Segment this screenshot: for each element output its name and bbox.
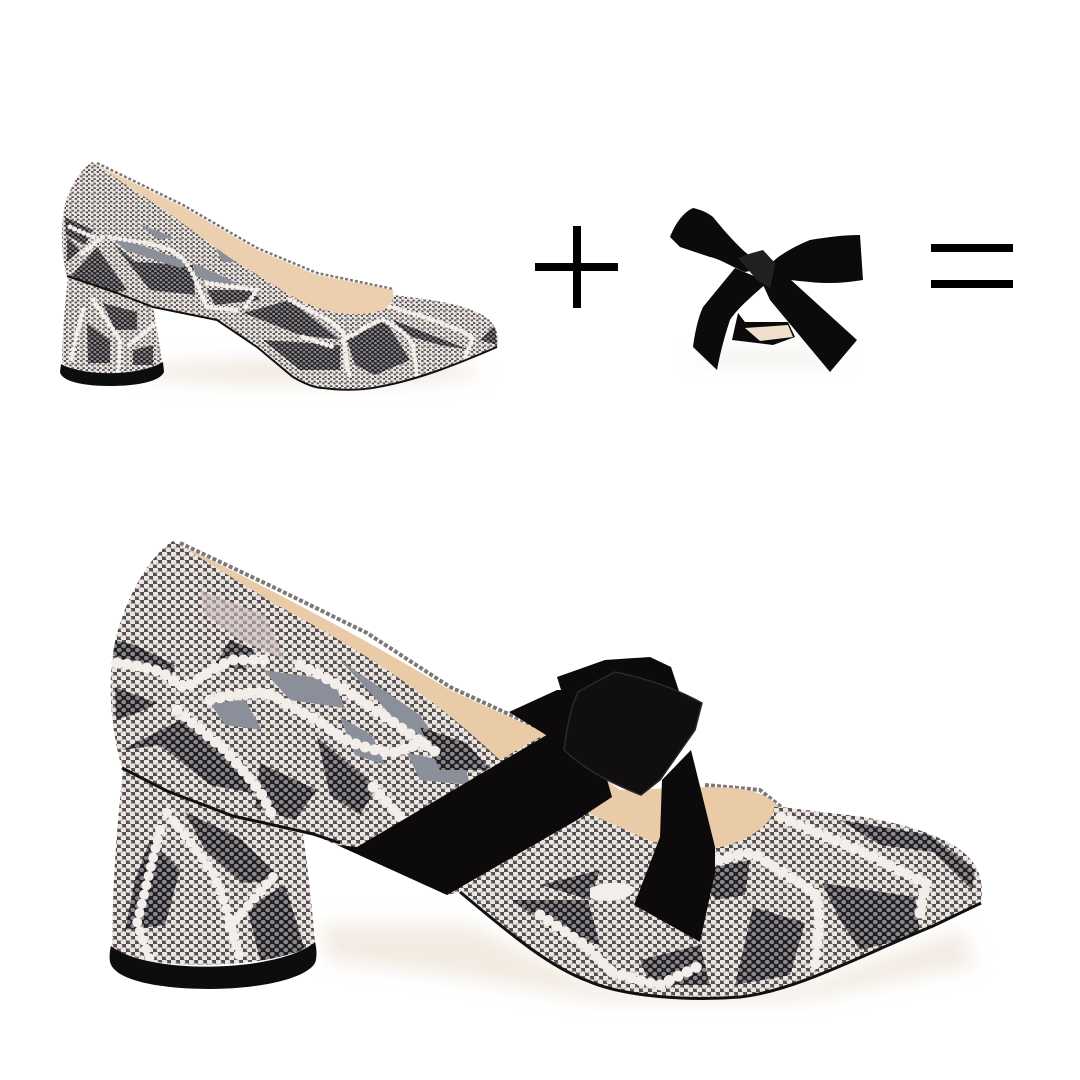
small pump heel <box>62 278 162 374</box>
large pump heel base <box>110 942 316 989</box>
small pump sole line <box>67 276 497 390</box>
black velvet bow accessory <box>670 208 863 372</box>
small plain snakeskin pump <box>60 162 498 391</box>
back strap of bow <box>509 690 595 745</box>
large snakeskin pump with bow <box>100 530 990 1010</box>
white scale patch <box>590 883 635 901</box>
bow strap loop <box>732 313 795 345</box>
large pump lining <box>180 545 780 850</box>
right bow tail <box>758 270 857 372</box>
small pump heel base <box>60 362 164 386</box>
large pump heel <box>112 770 315 966</box>
left bow tail <box>693 268 768 370</box>
small pump far collar <box>97 163 393 289</box>
back loop of bow <box>557 657 691 760</box>
large pump heel seam <box>122 768 340 843</box>
bow on large pump <box>337 657 715 942</box>
far collar piping <box>180 543 781 807</box>
white bead chains <box>117 660 926 985</box>
dark snake blotches <box>113 640 975 985</box>
plus sign <box>535 226 618 308</box>
right bow loop <box>768 235 863 283</box>
left bow loop <box>670 208 765 272</box>
pink speckled heel counter <box>200 590 285 660</box>
large pump upper <box>100 530 990 1010</box>
bow knot <box>738 250 775 288</box>
small pump upper <box>62 162 498 389</box>
gray blue blotches <box>210 660 470 785</box>
front bow loop <box>564 672 702 795</box>
diagonal velvet strap <box>337 720 612 895</box>
small pump lining <box>95 164 393 318</box>
bow tail <box>634 750 715 942</box>
equals sign <box>931 244 1013 288</box>
large pump sole line <box>460 892 981 998</box>
